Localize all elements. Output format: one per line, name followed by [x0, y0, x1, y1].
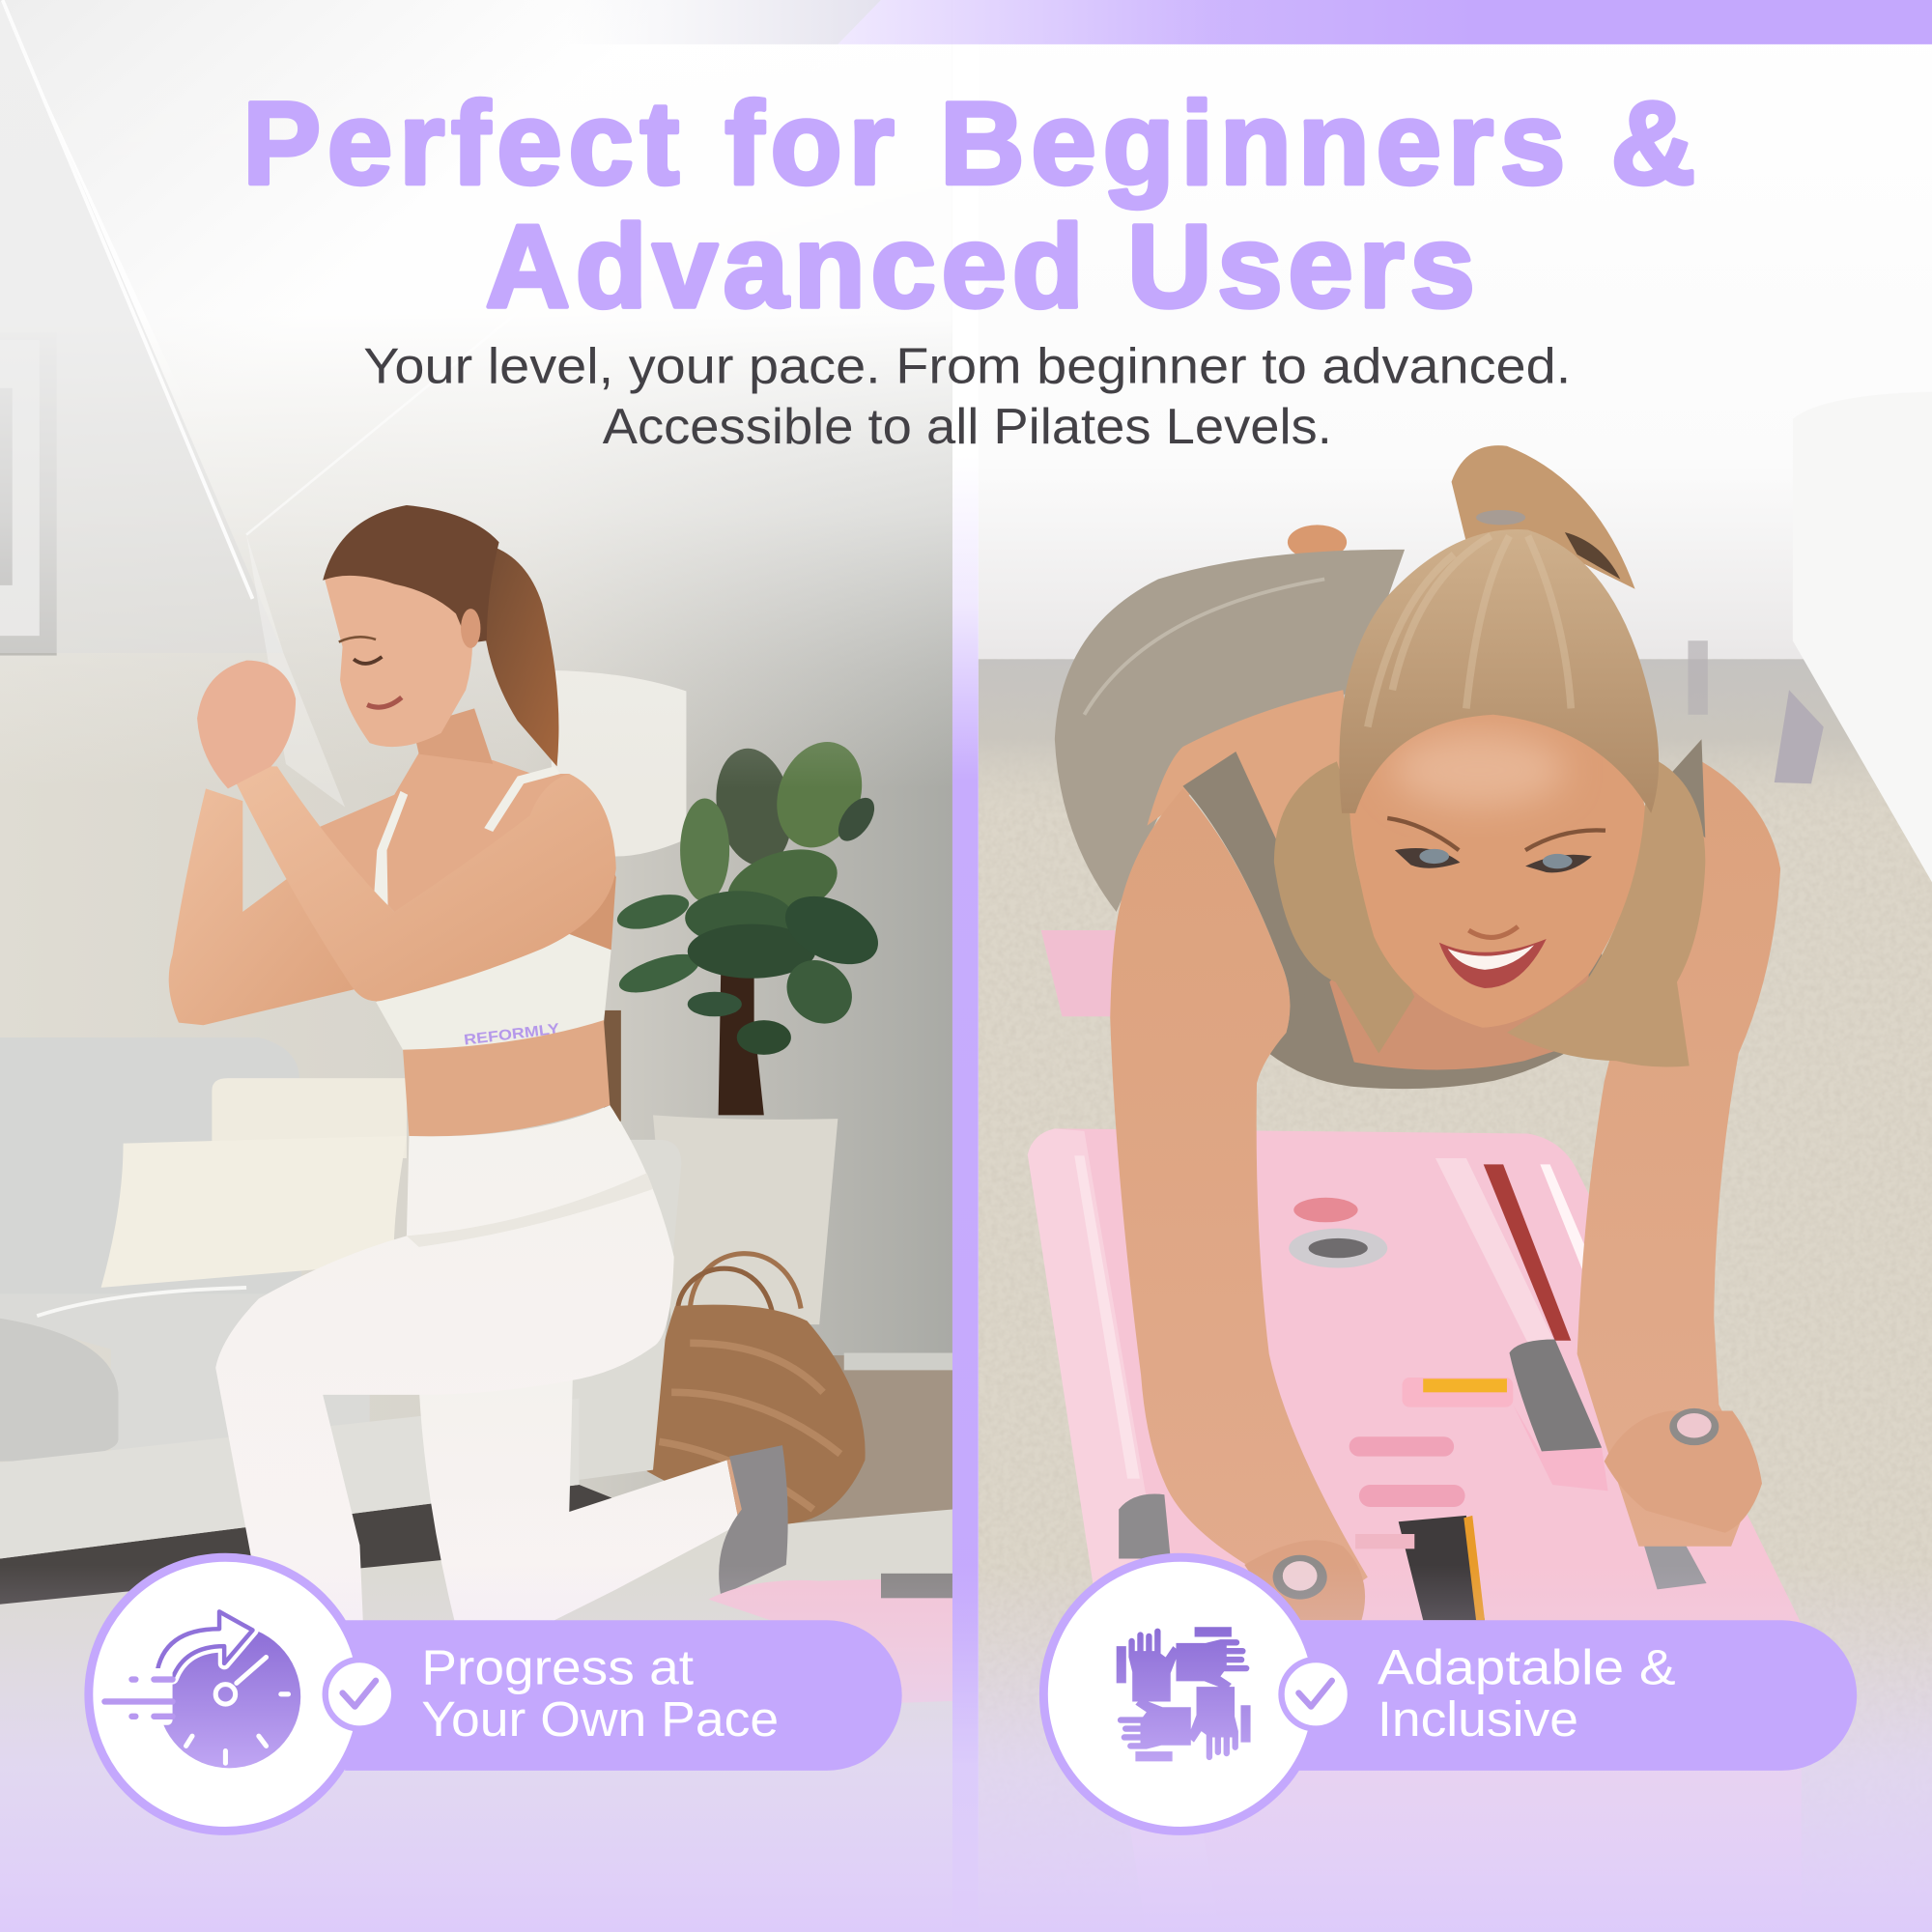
subtitle: Your level, your pace. From beginner to advanced.	[363, 339, 1571, 395]
label bar	[1293, 1620, 1857, 1771]
tank left strap	[1182, 752, 1312, 1033]
white sports bra	[376, 920, 611, 1050]
hair right lock	[1507, 761, 1705, 1066]
floor lamp shade	[549, 670, 686, 1122]
hair crown	[1339, 529, 1659, 813]
white fade over left wall	[0, 0, 952, 788]
plant pot	[653, 1115, 838, 1324]
olive shorts	[1055, 550, 1405, 912]
hair left lock	[1274, 761, 1414, 1054]
title: Perfect for Beginners &	[242, 77, 1695, 209]
icon: check badge	[1282, 1660, 1350, 1729]
shoulder behind and chest	[314, 753, 579, 1002]
fiddle leaf plant	[613, 730, 889, 1115]
top hair	[323, 505, 499, 643]
label text: Progress at	[421, 1640, 694, 1695]
pink side block	[1041, 930, 1115, 1016]
subtitle	[363, 339, 1571, 455]
title	[242, 77, 1695, 332]
icon: four interlocking hands	[1109, 1616, 1260, 1772]
back skin	[1148, 690, 1368, 899]
label text: Inclusive	[1378, 1691, 1578, 1747]
face	[1350, 712, 1645, 1028]
tank right strap	[1658, 739, 1705, 838]
title: Advanced Users	[486, 201, 1475, 332]
wicker basket	[647, 1254, 866, 1524]
hips and front thigh	[215, 1105, 674, 1633]
back wall	[979, 0, 1932, 666]
chest skin	[1329, 949, 1589, 1069]
light beam polygons	[0, 0, 881, 807]
vertical purple divider	[952, 456, 979, 1932]
icon circle	[89, 1557, 362, 1831]
under-arm torso skin	[529, 788, 616, 950]
white bed frame	[1688, 392, 1932, 882]
bra straps	[373, 766, 560, 918]
eyes, eyebrows and smile	[1387, 818, 1605, 988]
hair tie	[1476, 510, 1525, 525]
icon circle	[1043, 1557, 1318, 1831]
callout: adaptable and inclusive	[1043, 1557, 1857, 1831]
ankle	[727, 1458, 754, 1524]
back leg	[419, 1368, 739, 1627]
subtitle: Accessible to all Pilates Levels.	[603, 399, 1332, 455]
pink reformer board	[1028, 1128, 1802, 1932]
callout: progress at your own pace	[89, 1557, 902, 1831]
woman: lunging figure	[169, 505, 788, 1633]
label bar	[345, 1620, 902, 1771]
label text: Adaptable &	[1378, 1640, 1676, 1695]
label text	[421, 1640, 779, 1747]
ponytail	[474, 542, 558, 766]
ponytail	[1452, 445, 1635, 589]
face	[324, 565, 472, 747]
label text: Your Own Pace	[421, 1691, 779, 1747]
right hand on handle	[1605, 1408, 1762, 1533]
icon: check badge	[326, 1660, 394, 1729]
icon: speedometer with arrow	[104, 1611, 300, 1768]
left arm	[1110, 788, 1368, 1620]
panel: right photo, woman in plank on pink reformer	[979, 0, 1932, 1932]
foot	[1288, 525, 1347, 559]
panel: left photo, woman lunging in living room	[0, 0, 974, 1932]
near arm	[228, 766, 616, 1001]
wall	[0, 321, 952, 1559]
woman: plank figure	[1055, 445, 1780, 1620]
carpet floor	[979, 659, 1932, 1932]
far arm	[169, 788, 370, 1025]
label text	[1378, 1640, 1676, 1747]
reformly logo text: REFORMLY	[463, 1021, 560, 1049]
rug and floor	[0, 1353, 955, 1932]
eye, mouth, ear	[339, 609, 480, 707]
left hand on handle	[1244, 1540, 1365, 1620]
grey sock	[719, 1445, 788, 1596]
framed picture	[0, 404, 57, 655]
forehead highlight	[1392, 733, 1565, 807]
hair streaks	[1368, 536, 1571, 727]
mini reformer board	[708, 1574, 974, 1703]
midriff	[403, 1020, 610, 1136]
leggings waistband shadow	[407, 1173, 653, 1247]
right arm	[1577, 761, 1780, 1547]
top purple accent bar	[838, 0, 1932, 44]
sofa	[0, 1037, 681, 1559]
neck	[412, 708, 493, 764]
clasped hands	[197, 661, 296, 788]
lavender fade over lower photos	[0, 1565, 1932, 1932]
tank top front	[1269, 936, 1602, 1089]
